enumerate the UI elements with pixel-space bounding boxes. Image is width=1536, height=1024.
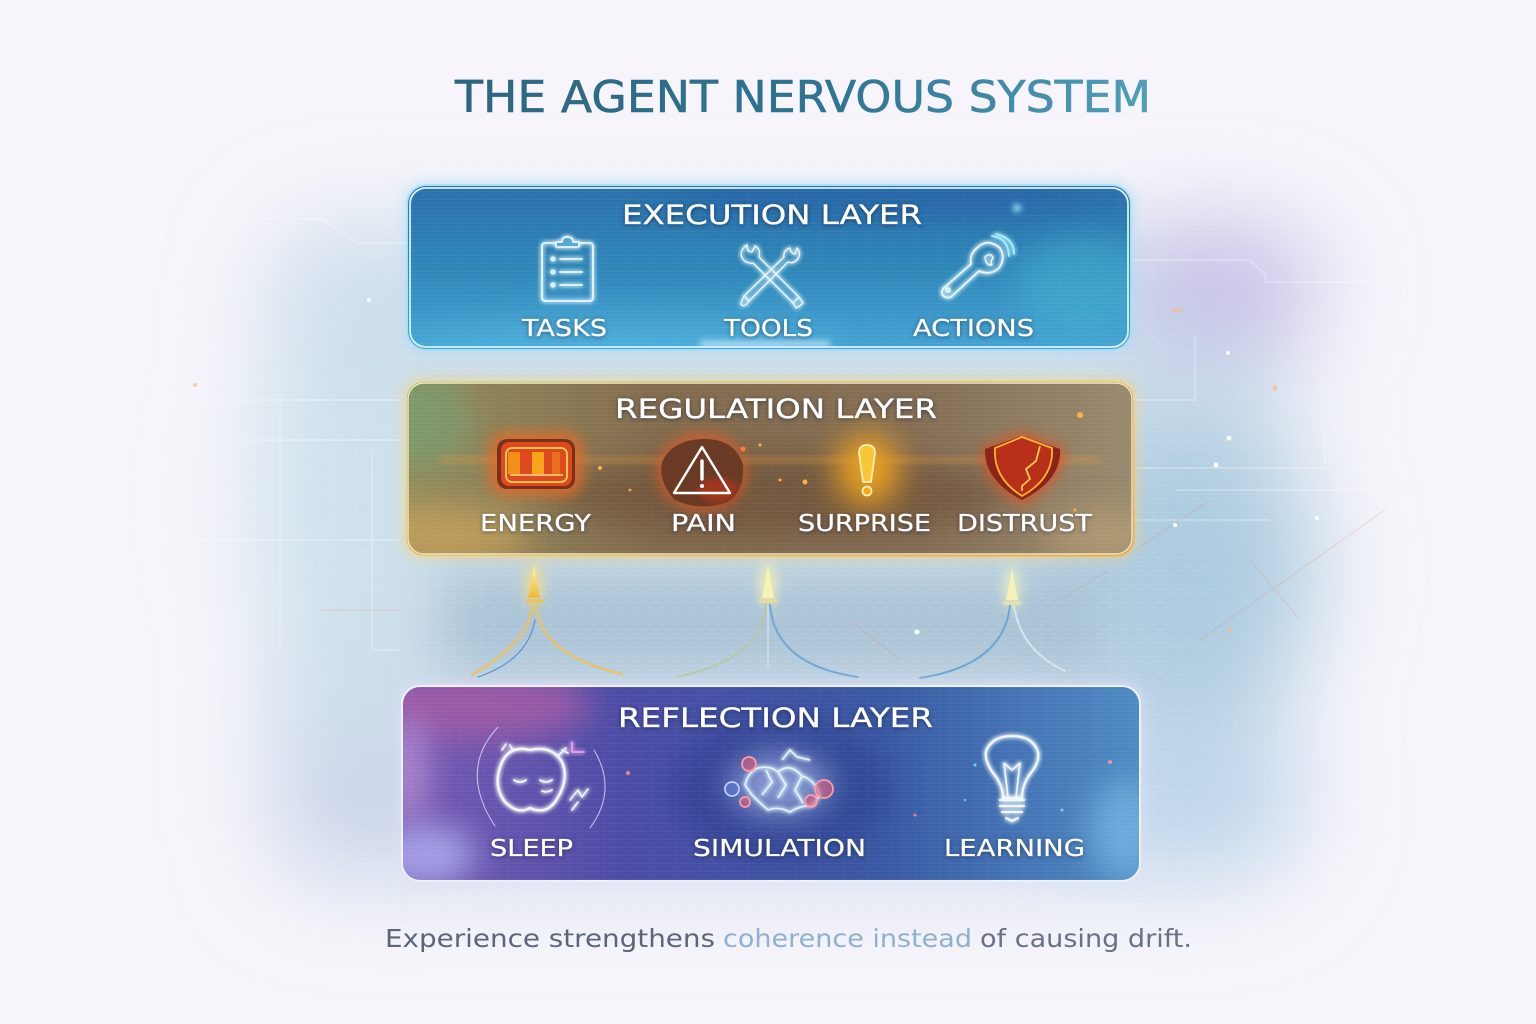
icon: tasks clipboard	[542, 237, 593, 301]
title: THE AGENT NERVOUS SYSTEM	[454, 72, 1151, 123]
label: learning: LEARNING	[944, 836, 1085, 862]
caption: experience strengthens coherence: coherence instead	[723, 924, 972, 953]
heading: execution layer: EXECUTION LAYER	[622, 200, 922, 231]
arrow: reflection to regulation centre	[676, 563, 858, 677]
arrow: reflection to regulation right	[920, 566, 1065, 678]
label: actions: ACTIONS	[913, 316, 1034, 342]
label: pain: PAIN	[671, 511, 736, 537]
arrow: reflection to regulation left	[472, 563, 622, 677]
caption: experience strengthens coherence: Experience strengthens	[385, 924, 715, 953]
heading: reflection layer: REFLECTION LAYER	[618, 703, 933, 734]
heading: regulation layer: REGULATION LAYER	[615, 394, 937, 425]
icon: actions wrench with signal	[942, 234, 1014, 298]
label: sleep: SLEEP	[490, 836, 573, 862]
label: distrust: DISTRUST	[957, 511, 1093, 537]
infographic canvas	[193, 79, 1386, 952]
label: tasks: TASKS	[521, 316, 607, 342]
background circuit haze	[140, 165, 1400, 935]
label: simulation: SIMULATION	[693, 836, 866, 862]
icon: distrust shield	[982, 431, 1064, 506]
label: energy: ENERGY	[480, 511, 592, 537]
panel: execution layer	[400, 177, 1138, 356]
icon: sleep face	[477, 727, 605, 828]
panel: regulation layer	[350, 370, 1180, 563]
icon: surprise exclamation	[836, 434, 900, 506]
icon: energy battery	[488, 431, 584, 497]
caption: experience strengthens coherence	[385, 924, 1192, 953]
label: tools: TOOLS	[723, 316, 813, 342]
caption: experience strengthens coherence: of causing drift.	[980, 924, 1192, 953]
label: surprise: SURPRISE	[798, 511, 931, 537]
panel: reflection layer	[370, 670, 1161, 885]
icon: learning light bulb	[986, 736, 1038, 821]
icon: pain warning	[656, 432, 748, 512]
icon: simulation network	[725, 750, 833, 815]
icon: tools crossed	[741, 245, 803, 308]
